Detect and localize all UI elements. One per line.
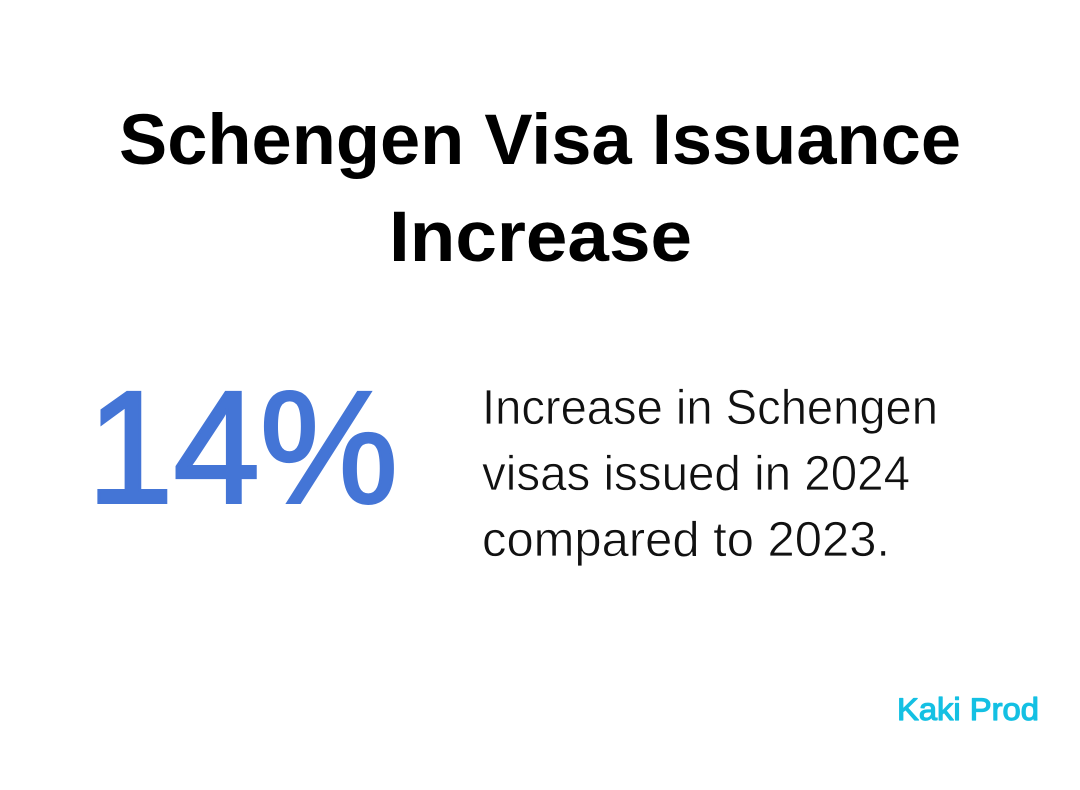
statistic: 14%: 14%	[87, 358, 398, 536]
title: Increase	[389, 198, 692, 277]
description text: Increase in Schengen	[482, 381, 938, 435]
description text	[482, 381, 938, 567]
title	[119, 101, 961, 277]
logo: Kaki Prod: Kaki Prod	[897, 691, 1039, 727]
description text: compared to 2023.	[482, 513, 890, 567]
description text: visas issued in 2024	[482, 447, 910, 501]
title: Schengen Visa Issuance	[119, 101, 961, 180]
